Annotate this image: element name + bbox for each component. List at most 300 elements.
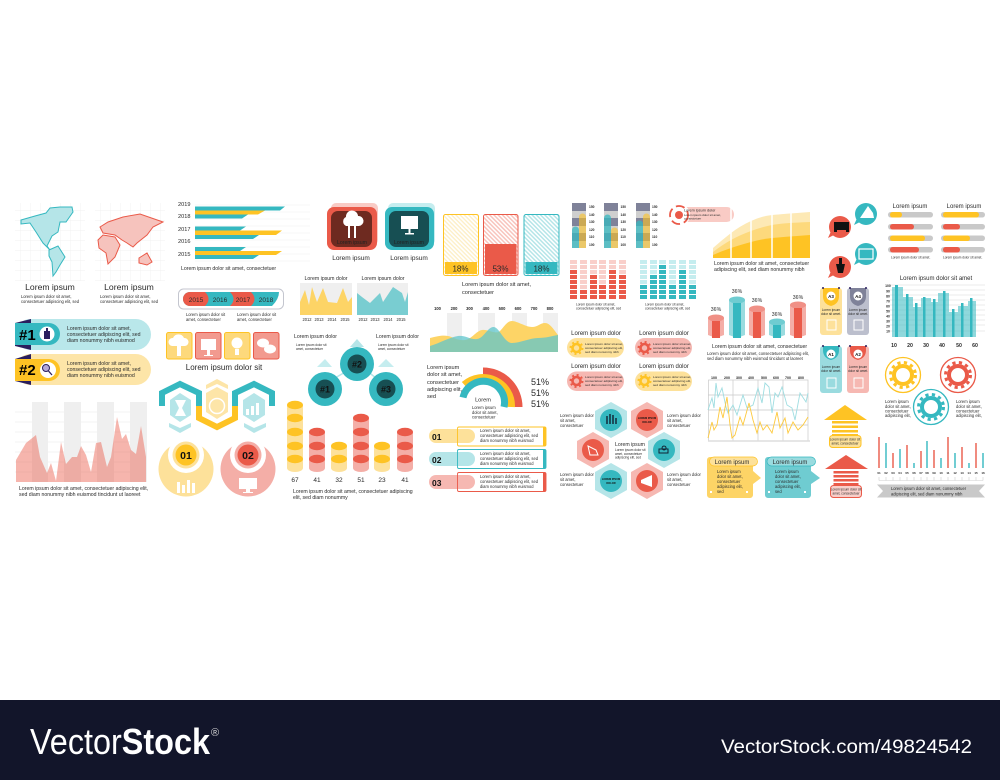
panel: gear pills: consectetuer adipiscing elit, (653, 379, 691, 383)
chart: thin column chart: 15 (974, 471, 978, 475)
chart: stacked grey columns: 130 (620, 220, 626, 224)
arrow: red up: amet, consectetuer (832, 492, 860, 496)
chart: red area with grey bands (15, 402, 148, 498)
chart: stacked cylinders: elit, sed diam nonummy (293, 495, 348, 501)
panel: #1 ribbon (15, 319, 151, 350)
chart: teal bar chart: 70 (886, 300, 890, 304)
panel: tag A3: dolor sit amet. (821, 312, 841, 316)
chart: line chart: 400 (748, 376, 754, 380)
panel: gear pills: Lorem ipsum dolor (639, 331, 689, 337)
chart: thin column chart: 16 (981, 471, 985, 475)
chart: stacked grey columns: 150 (620, 205, 626, 209)
chart: stacked grey columns: 130 (589, 220, 595, 224)
list item 03: consectetuer adipiscing elit, sed (480, 479, 539, 484)
callout: yellow speech box: Lorem ipsum (715, 460, 749, 466)
chart: teal small area: 2012 (358, 317, 368, 322)
chart: line chart: 200 (724, 376, 730, 380)
chart: teal bar chart: 90 (886, 290, 890, 294)
chart: teal bar chart: 40 (939, 343, 945, 349)
panel: progress bars (888, 204, 985, 260)
chart: 3D cylinder bars: 36% (752, 298, 763, 304)
panel: America map: consectetuer adipiscing elit, sed (21, 299, 80, 304)
card: red icon: Lorem ipsum (337, 240, 367, 246)
chart: teal block columns: consectetuer adipiscing elit, sed (645, 306, 690, 310)
chart: yellow arch: Lorem ipsum dolor sit amet, consectetuer (714, 261, 809, 267)
arrow: yellow up: Lorem ipsum dolor sit (830, 438, 860, 442)
chart: 3D cylinder bars: 36% (732, 289, 743, 295)
panel: world map (95, 203, 165, 304)
panel: gear pills: consectetuer adipiscing elit, (653, 346, 691, 350)
panel: tag A4: dolor sit amet. (848, 312, 868, 316)
panel: hexagon cluster: consectetuer (667, 482, 691, 487)
chart: 3D cylinder bars (707, 289, 809, 361)
chart: wave area: 200 (451, 306, 458, 311)
chart: thin column chart: 06 (912, 471, 916, 475)
callout: yellow speech box: Lorem ipsum (717, 469, 741, 474)
panel: tag A1 (820, 345, 842, 393)
chart: yellow small area (300, 276, 352, 322)
panel: progress bars: Lorem ipsum (893, 204, 927, 210)
panel: year pills: 2016 (213, 297, 228, 304)
callout: red gauge pill: Lorem ipsum dolor (684, 208, 716, 212)
chart: stacked cylinders: Lorem ipsum dolor sit amet, consectetuer adipiscing (293, 489, 413, 495)
chart: thin column chart: 14 (967, 471, 971, 475)
chart: teal bar chart: 60 (886, 304, 890, 308)
callout: yellow speech box: dolor sit amet, (717, 474, 743, 479)
panel: tag A2: dolor sit amet. (848, 369, 868, 373)
panel: badge 02: 02 (242, 450, 254, 462)
chart: stacked cylinders: 41 (401, 477, 409, 484)
panel: hexagon cluster: Lorem ipsum dolor (667, 472, 702, 477)
panel: hexagon chain (162, 379, 272, 433)
card captions: Lorem ipsum (332, 255, 370, 262)
panel: #1 ribbon: diam nonummy nibh euismod (67, 338, 135, 344)
chart: line chart: 600 (773, 376, 779, 380)
chart: teal bar chart: 40 (886, 314, 890, 318)
chart: thin column chart: 08 (925, 471, 929, 475)
chart: rainbow arcs: Lorem ipsum (427, 365, 460, 371)
list item 03: 03 (432, 478, 442, 488)
chart: thin column chart: 04 (898, 471, 902, 475)
chart: thin column chart: 09 (932, 471, 936, 475)
footer band: ® (211, 727, 219, 739)
panel: year pills: Lorem ipsum dolor sit (186, 312, 226, 317)
chart: three percent columns: consectetuer (462, 290, 494, 296)
panel: hexagon cluster: LOREM IPSUM (638, 416, 656, 420)
chart: yearly horizontal bars: 2017 (178, 227, 190, 233)
chart: teal bar chart (885, 276, 985, 349)
panel: tag A3 (820, 287, 842, 335)
chart: 3D cylinder bars: 36% (711, 307, 722, 313)
chart: teal block columns: Lorem ipsum dolor sit amet, (645, 302, 684, 306)
card: red icon (327, 203, 378, 250)
chart: rainbow arcs: dolor sit amet, (427, 372, 463, 378)
list item 01: 01 (432, 432, 442, 442)
panel: gears (885, 358, 982, 424)
chart: yellow arch: adipiscing elit, sed diam nonummy nibh (714, 267, 805, 273)
list item 02: Lorem ipsum dolor sit amet, (480, 451, 531, 456)
chart: rainbow arcs: adipiscing elit, (427, 387, 463, 393)
chart: wave area: 300 (466, 306, 474, 311)
chart: teal small area: 2015 (396, 317, 406, 322)
panel: tag A1: A1 (828, 352, 834, 357)
chart: stacked cylinders: 32 (335, 477, 343, 484)
chart: line chart: 300 (736, 376, 742, 380)
chart: stacked cylinders: 23 (378, 477, 386, 484)
panel: hexagon cluster: DOLOR (606, 481, 616, 485)
chart: teal small area: Lorem ipsum dolor (362, 276, 405, 282)
arrow: red up: Lorem ipsum dolor sit (831, 488, 861, 492)
chart: stacked cylinders: 41 (313, 477, 321, 484)
heading: icon tiles caption: Lorem ipsum dolor sit (186, 363, 263, 372)
chart: 3D cylinder bars: Lorem ipsum dolor sit amet, consectetuer adipiscing elit, (707, 351, 809, 356)
panel: numbered circle trio: #3 (381, 384, 391, 394)
chart: three percent columns: 53% (492, 264, 509, 274)
list item 03 (429, 472, 546, 492)
chart: red block columns (570, 260, 626, 310)
chart: teal bar chart: 50 (886, 310, 890, 314)
chart: thin column chart: 11 (946, 471, 950, 475)
chart: stacked grey columns: 150 (589, 205, 595, 209)
chart: yearly horizontal bars: Lorem ipsum dolor sit amet, consectetuer (181, 266, 276, 272)
chart: red area with grey bands: Lorem ipsum dolor sit amet, consectetuer adipiscing elit, (19, 486, 148, 492)
arrow: yellow up: amet, consectetuer (831, 442, 859, 446)
chart: rainbow arcs: Lorem (475, 398, 491, 404)
panel: badge 01 (158, 437, 214, 496)
chart: 3D cylinder bars: Lorem ipsum dolor sit amet, consectetuer (712, 344, 807, 350)
panel: gear pills: sed diam nonummy nibh (653, 350, 687, 354)
panel: world map: Lorem ipsum (104, 282, 154, 292)
panel: badge 01: 01 (180, 450, 192, 462)
chart: line chart: 500 (761, 376, 767, 380)
chart: thin column chart: 13 (960, 471, 964, 475)
chart: thin column chart: 02 (884, 471, 888, 475)
panel: numbered circle trio: amet, consectetuer (296, 347, 324, 351)
panel: tag A2: A2 (855, 352, 861, 357)
panel: gear pills: Lorem ipsum dolor sit amet, (585, 375, 623, 379)
list item 01: diam nonummy nibh euismod (480, 438, 534, 443)
panel: #2 ribbon (15, 354, 151, 385)
chart: red block columns: Lorem ipsum dolor sit amet, (576, 302, 615, 306)
panel: numbered circle trio: Lorem ipsum dolor (294, 334, 337, 340)
chart: 3D cylinder bars: 36% (772, 312, 783, 318)
panel: gears: consectetuer (956, 408, 980, 414)
chart: teal bar chart: 10 (891, 343, 897, 349)
chart: teal small area (357, 276, 408, 322)
chart: line chart (708, 376, 810, 441)
panel: gear pills: Lorem ipsum dolor sit amet, (653, 375, 691, 379)
chart: wave area: 100 (434, 306, 442, 311)
callout: yellow speech box: consectetuer (717, 479, 741, 484)
chart: thin column chart: 10 (939, 471, 943, 475)
chart: teal block columns (640, 260, 696, 310)
panel: hexagon cluster: Lorem ipsum (615, 442, 645, 448)
chart: three percent columns (444, 214, 559, 296)
panel: #2 ribbon: #2 (19, 362, 36, 379)
callout: red gauge pill (668, 204, 734, 226)
footer band: VectorStock.com/49824542 (721, 737, 972, 758)
icons: speech bubbles (828, 203, 877, 278)
arrow: yellow up (824, 405, 867, 448)
chart: rainbow arcs: 51% (531, 388, 549, 398)
panel: progress bars: Lorem ipsum (947, 204, 981, 210)
panel: #2 ribbon: Lorem ipsum dolor sit amet, (67, 361, 131, 367)
chart: stacked cylinders (287, 401, 413, 501)
ribbon: grey caption: Lorem ipsum dolor sit amet, consectetuer (891, 486, 967, 491)
chart: rainbow arcs: sed (427, 394, 436, 400)
panel: hexagon cluster: consectetuer (560, 423, 584, 428)
panel: gears: Lorem ipsum (885, 399, 909, 404)
panel: gears: Lorem ipsum (956, 399, 980, 404)
list item 03: diam nonummy nibh euismod (480, 484, 534, 489)
panel: #2 ribbon: diam nonummy nibh euismod (67, 373, 135, 379)
chart: rainbow arcs: 51% (531, 399, 549, 409)
chart: stacked grey columns: 110 (589, 235, 594, 239)
chart: thin column chart: 12 (953, 471, 957, 475)
chart: red block columns: consectetuer adipiscing elit, sed (576, 306, 621, 310)
list item 02: diam nonummy nibh euismod (480, 461, 534, 466)
panel: gear pills: Lorem ipsum dolor (639, 364, 689, 370)
panel: year pills (178, 289, 284, 322)
chart: thin column chart: 01 (877, 471, 881, 475)
chart: rainbow arcs: consectetuer (427, 380, 459, 386)
panel: hexagon cluster: Lorem ipsum dolor sit (615, 448, 646, 452)
chart: rainbow arcs: 51% (531, 377, 549, 387)
chart: teal bar chart: 60 (972, 343, 978, 349)
panel: hexagon cluster: consectetuer (667, 423, 691, 428)
panel: numbered circle trio: #2 (352, 360, 362, 370)
panel: America map: Lorem ipsum (25, 282, 75, 292)
chart: yellow small area: Lorem ipsum dolor (305, 276, 348, 282)
list item 02: consectetuer adipiscing elit, sed (480, 456, 539, 461)
panel: numbered circle trio: Lorem ipsum dolor sit (296, 343, 327, 347)
callout: yellow speech box: adipiscing elit, (717, 484, 743, 489)
callout: yellow speech box: sed (717, 489, 724, 494)
panel: gear pills: Lorem ipsum dolor sit amet, (585, 342, 623, 346)
chart: stacked grey columns: 100 (620, 243, 626, 247)
panel: hexagon cluster: Lorem ipsum dolor (560, 472, 595, 477)
panel: world map: Lorem ipsum dolor sit amet, (100, 294, 151, 299)
card: teal icon: Lorem ipsum (394, 240, 424, 246)
callout: teal speech box (765, 457, 820, 498)
card: teal icon (385, 203, 435, 250)
panel: four icon tiles (166, 332, 279, 359)
callout: yellow speech box (707, 457, 761, 498)
chart: rainbow arcs (427, 365, 549, 420)
chart: rainbow arcs: consectetuer (472, 414, 496, 420)
panel: gears: dolor sit amet, (956, 404, 982, 409)
panel: hexagon cluster: sit amet, (667, 477, 682, 482)
panel: gear pills: consectetuer adipiscing elit, (585, 379, 623, 383)
panel: hexagon cluster: DOLOR (642, 420, 652, 424)
callout: red gauge pill: Lorem ipsum dolor sit amet, (684, 213, 721, 217)
panel: tag A4: A4 (855, 294, 861, 299)
panel: gears: consectetuer (885, 408, 909, 414)
chart: teal bar chart: 30 (923, 343, 929, 349)
chart: wave area: 600 (515, 306, 522, 311)
chart: thin column chart (877, 437, 985, 480)
panel: numbered circle trio: #1 (320, 384, 330, 394)
chart: teal bar chart: 80 (886, 294, 890, 298)
chart: stacked cylinders: 51 (357, 477, 365, 484)
panel: world map: consectetuer adipiscing elit, sed (100, 299, 159, 304)
callout: teal speech box: consectetuer (775, 479, 799, 484)
panel: progress bars: Lorem ipsum dolor sit amet. (891, 256, 930, 260)
footer band (0, 700, 1000, 780)
chart: yearly horizontal bars: 2016 (178, 239, 190, 245)
panel: #2 ribbon: consectetuer adipiscing elit, sed (67, 367, 141, 373)
panel: hexagon cluster: amet, consectetuer (615, 452, 643, 456)
chart: line chart: 700 (785, 376, 791, 380)
panel: tag A3: Lorem ipsum (822, 308, 841, 312)
panel: gear pills: Lorem ipsum dolor (571, 364, 621, 370)
chart: teal bar chart: 100 (885, 284, 891, 288)
panel: hexagon cluster: adipiscing elit, sed (615, 456, 641, 460)
chart: yellow small area: 2014 (327, 317, 337, 322)
chart: yearly horizontal bars: 2018 (178, 214, 190, 220)
callout: teal speech box: sed (775, 489, 782, 494)
panel: tag A4 (847, 287, 869, 335)
chart: teal bar chart: 20 (886, 324, 890, 328)
chart: yellow small area: 2015 (340, 317, 350, 322)
chart: thin column chart: 03 (891, 471, 895, 475)
panel: tag A1: Lorem ipsum (822, 365, 841, 369)
panel: year pills: amet, consectetuer (237, 317, 272, 322)
chart: wave area (430, 306, 558, 352)
chart: stacked grey columns: 120 (589, 228, 595, 232)
chart: wave area: 700 (531, 306, 538, 311)
chart: three percent columns: Lorem ipsum dolor sit amet, (462, 282, 531, 288)
panel: America map (15, 203, 85, 304)
chart: yellow small area: 2013 (314, 317, 324, 322)
chart: stacked grey columns: 140 (620, 213, 626, 217)
panel: year pills: amet, consectetuer (186, 317, 221, 322)
ribbon: grey caption (877, 484, 985, 498)
chart: stacked grey columns: 110 (652, 235, 657, 239)
panel: year pills: 2018 (259, 297, 274, 304)
chart: stacked grey columns: 120 (652, 228, 658, 232)
chart: stacked grey columns: 150 (652, 205, 658, 209)
panel: year pills: 2015 (189, 297, 204, 304)
chart: stacked grey columns: 130 (652, 220, 658, 224)
chart: three percent columns: 18% (533, 264, 550, 274)
panel: numbered circle trio (294, 334, 419, 406)
chart: rainbow arcs: dolor sit amet, (472, 410, 498, 415)
chart: red area with grey bands: sed diam nonummy nibh euismod tincidunt ut laoreet (19, 492, 141, 498)
list item 02 (429, 450, 546, 468)
panel: tag A2: Lorem ipsum (849, 365, 868, 369)
callout: teal speech box: dolor sit amet, (775, 474, 801, 479)
panel: tag A3: A3 (828, 294, 834, 299)
panel: hexagon cluster: sit amet, (667, 418, 682, 423)
panel: gear pills: Lorem ipsum dolor sit amet, (653, 342, 691, 346)
panel: gears: adipiscing elit, (885, 413, 911, 418)
panel: badge 02 (220, 437, 276, 496)
chart: teal bar chart: 50 (956, 343, 962, 349)
panel: numbered circle trio: Lorem ipsum dolor sit (378, 343, 409, 347)
chart: teal small area: 2014 (383, 317, 393, 322)
chart: 3D cylinder bars: sed diam nonummy nibh euismod tincidunt ut laoreet (707, 356, 804, 361)
chart: three percent columns: 18% (452, 264, 469, 274)
panel: #1 ribbon: consectetuer adipiscing elit, sed (67, 332, 141, 338)
panel: numbered circle trio: Lorem ipsum dolor (376, 334, 419, 340)
panel: hexagon cluster: consectetuer (560, 482, 584, 487)
panel: America map: Lorem ipsum dolor sit amet, (21, 294, 72, 299)
card captions: Lorem ipsum (390, 255, 428, 262)
panel: gears: adipiscing elit, (956, 413, 982, 418)
chart: thin column chart: 07 (919, 471, 923, 475)
panel: tag A4: Lorem ipsum (849, 308, 868, 312)
chart: stacked grey columns: 110 (620, 235, 626, 239)
chart: line chart: 800 (798, 376, 804, 380)
panel: gear pills (567, 331, 692, 391)
panel: gear pills: sed diam nonummy nibh (653, 383, 687, 387)
panel: #1 ribbon: Lorem ipsum dolor sit amet, (67, 326, 131, 332)
panel: progress bars: Lorem ipsum dolor sit amet. (943, 256, 982, 260)
panel: gear pills: sed diam nonummy nibh (585, 350, 619, 354)
chart: teal small area: 2013 (370, 317, 380, 322)
panel: hexagon cluster: Lorem ipsum dolor (667, 413, 702, 418)
chart: yearly horizontal bars: 2015 (178, 252, 190, 258)
list item 03: Lorem ipsum dolor sit amet, (480, 474, 531, 479)
chart: yellow small area: 2012 (302, 317, 312, 322)
chart: teal bar chart: 20 (907, 343, 913, 349)
chart: 3D cylinder bars: 36% (793, 295, 804, 301)
panel: hexagon cluster (560, 402, 702, 499)
chart: teal bar chart: 30 (886, 320, 890, 324)
chart: stacked grey columns: 100 (652, 243, 658, 247)
chart: wave area: 800 (547, 306, 554, 311)
panel: tag A1: dolor sit amet. (821, 369, 841, 373)
chart: teal bar chart: Lorem ipsum dolor sit amet (900, 276, 973, 282)
list item 02: 02 (432, 455, 442, 465)
chart: yellow arch (713, 205, 810, 273)
panel: #1 ribbon: #1 (19, 327, 36, 344)
chart: yearly horizontal bars (178, 202, 310, 272)
ribbon: grey caption: adipiscing elit, sed diam nonummy nibh (891, 492, 963, 496)
chart: yearly horizontal bars: 2019 (178, 202, 190, 208)
panel: hexagon cluster: sit amet, (560, 418, 575, 423)
panel: gears: dolor sit amet, (885, 404, 911, 409)
chart: stacked grey columns (572, 203, 658, 248)
list item 01: Lorem ipsum dolor sit amet, (480, 428, 531, 433)
list item 01: consectetuer adipiscing elit, sed (480, 433, 539, 438)
panel: gear pills: sed diam nonummy nibh (585, 383, 619, 387)
logo: VectorStock: VectorStock (30, 721, 211, 762)
chart: wave area: 500 (499, 306, 506, 311)
chart: thin column chart: 05 (905, 471, 909, 475)
panel: gear pills: consectetuer adipiscing elit, (585, 346, 623, 350)
callout: teal speech box: Lorem ipsum (773, 460, 807, 466)
chart: line chart: 100 (711, 376, 717, 380)
card captions (332, 255, 428, 262)
panel: tag A2 (847, 345, 869, 393)
panel: year pills: Lorem ipsum dolor sit (237, 312, 277, 317)
chart: stacked grey columns: 120 (620, 228, 626, 232)
chart: stacked grey columns: 100 (589, 243, 595, 247)
chart: stacked grey columns: 140 (589, 213, 595, 217)
callout: red gauge pill: consectetuer (684, 216, 701, 220)
callout: teal speech box: adipiscing elit, (775, 484, 801, 489)
panel: year pills: 2017 (236, 297, 251, 304)
panel: gear pills: Lorem ipsum dolor (571, 331, 621, 337)
panel: numbered circle trio: amet, consectetuer (378, 347, 406, 351)
arrow: red up (825, 455, 868, 498)
panel: hexagon cluster: LOREM IPSUM (602, 477, 620, 481)
chart: stacked grey columns: 140 (652, 213, 658, 217)
chart: wave area: 400 (483, 306, 490, 311)
chart: rainbow arcs: Lorem ipsum (472, 405, 496, 410)
